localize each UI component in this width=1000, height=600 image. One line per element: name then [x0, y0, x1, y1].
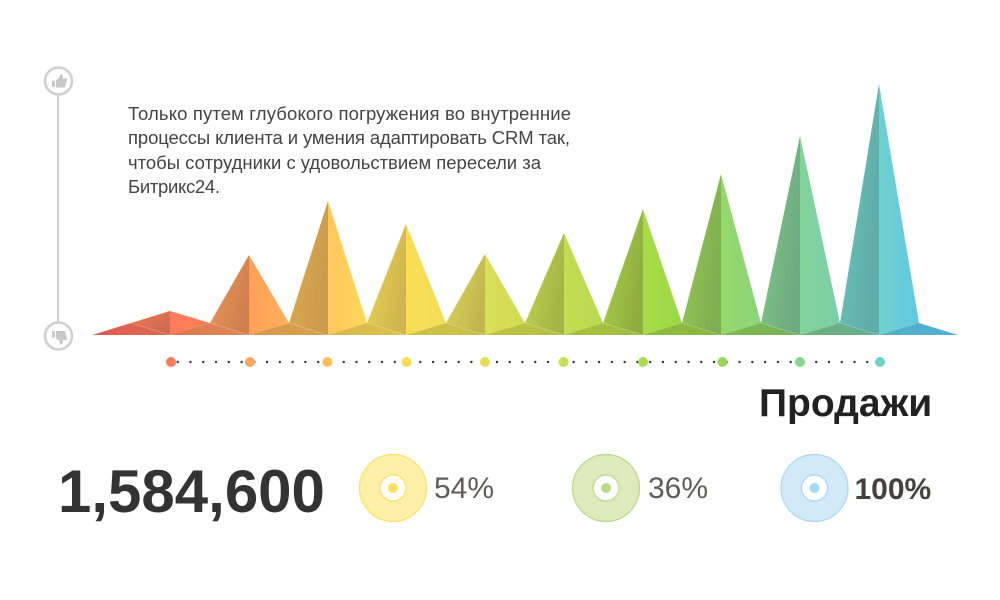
description text — [128, 103, 571, 197]
description text: Битрикс24. — [128, 176, 220, 197]
stat: 36% — [572, 454, 708, 522]
dotted timeline — [166, 357, 885, 367]
icon: thumb down — [45, 322, 72, 350]
satisfaction scale — [45, 68, 72, 350]
description text: процессы клиента и умения адаптировать CRM так, — [128, 127, 570, 148]
stat: 36%: 36% — [648, 472, 708, 505]
description text: чтобы сотрудники с удовольствием пересели за — [128, 152, 542, 173]
description text: Только путем глубокого погружения во внутренние — [128, 103, 571, 124]
heading: Продажи — [759, 382, 932, 425]
pyramid chart — [92, 84, 958, 335]
total figure: 1,584,600 — [58, 458, 325, 525]
stat: 100% — [781, 454, 931, 522]
stat: 54% — [360, 454, 494, 522]
stat: 100%: 100% — [854, 473, 931, 506]
scale line — [57, 95, 59, 323]
icon: thumb up — [45, 68, 72, 94]
stat: 54%: 54% — [434, 472, 494, 505]
